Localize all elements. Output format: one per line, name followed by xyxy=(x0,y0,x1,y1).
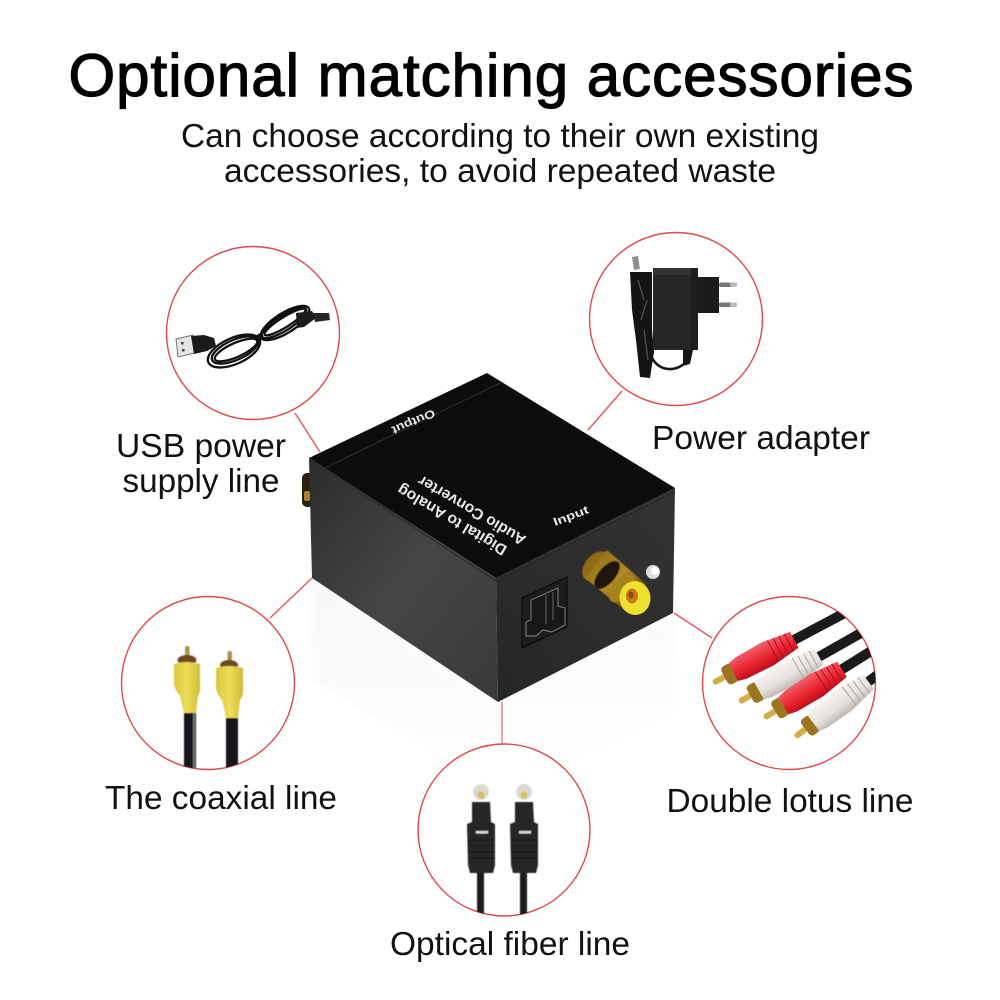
label: Double lotus line xyxy=(666,782,914,819)
rear connector xyxy=(302,473,314,507)
subtitle: Can choose according to their own existing xyxy=(181,117,819,154)
panel: coaxial line xyxy=(105,596,337,816)
device printed labels: Input xyxy=(552,504,591,529)
device printed labels: Output xyxy=(389,406,437,436)
plug: white 1 xyxy=(738,630,863,704)
top face xyxy=(309,373,675,578)
title: Optional matching accessories xyxy=(68,42,914,109)
RCA socket xyxy=(577,546,660,616)
plug 1 xyxy=(467,784,495,922)
optical port xyxy=(522,577,567,648)
icon: coaxial plugs xyxy=(174,646,243,772)
icon: optical plugs xyxy=(467,784,538,922)
label xyxy=(116,427,286,499)
circle outline xyxy=(590,232,762,406)
label: Power adapter xyxy=(652,419,870,456)
icon: RCA plugs xyxy=(712,611,876,738)
panel: USB power supply line xyxy=(116,246,340,499)
panel: power adapter xyxy=(590,232,870,456)
subtitle xyxy=(181,117,819,189)
label: supply line xyxy=(122,462,280,499)
plug: red 2 xyxy=(764,647,872,720)
icon: USB cable xyxy=(176,300,330,374)
panel: double lotus line xyxy=(669,596,912,812)
circle outline xyxy=(166,246,340,420)
device printed labels: Digital to Analog xyxy=(395,481,510,558)
panel: optical fiber line xyxy=(390,744,630,962)
label: USB power xyxy=(116,427,286,464)
circle outline xyxy=(418,744,590,916)
left face xyxy=(309,458,498,702)
device printed labels xyxy=(389,406,591,558)
device printed labels: Audio Converter xyxy=(415,472,529,548)
product reflection xyxy=(312,580,673,800)
connector lines xyxy=(270,391,712,744)
front face xyxy=(496,488,675,702)
product: audio converter xyxy=(302,373,675,702)
circle outline xyxy=(122,596,294,770)
subtitle: accessories, to avoid repeated waste xyxy=(224,152,776,189)
label: Optical fiber line xyxy=(390,925,630,962)
plug: red 1 xyxy=(712,611,846,685)
plug 2 xyxy=(510,784,538,922)
icon: power adapter xyxy=(630,256,737,378)
label: The coaxial line xyxy=(105,779,337,816)
plug: white 2 xyxy=(794,670,876,738)
circle outline xyxy=(702,596,876,770)
